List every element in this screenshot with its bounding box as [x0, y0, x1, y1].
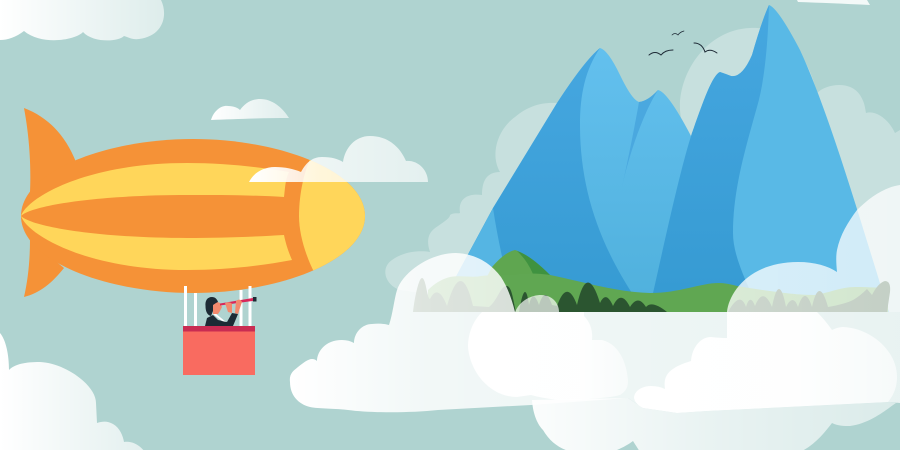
cloud: in front of airship — [249, 136, 428, 182]
cloud: bottom centre — [532, 398, 897, 450]
mountain crease — [622, 90, 658, 187]
gondola basket — [183, 326, 255, 375]
back hill — [488, 250, 550, 276]
right mountain — [645, 5, 889, 312]
jacket — [205, 313, 238, 326]
left mountain shadow — [437, 48, 645, 312]
face — [213, 300, 222, 314]
cloud: white front right — [634, 312, 897, 413]
yellow nose — [299, 160, 365, 270]
hair — [205, 297, 218, 316]
cloud: bottom left — [0, 333, 145, 450]
right tree line — [728, 281, 890, 312]
collar — [213, 313, 226, 322]
left tree line — [413, 278, 667, 312]
airship fins — [24, 108, 76, 297]
man with telescope — [205, 297, 256, 326]
gondola ropes — [184, 286, 252, 327]
cloud: top right sliver — [797, 0, 870, 5]
green hills — [428, 250, 888, 312]
basket rim — [183, 326, 255, 332]
left mountain — [437, 48, 700, 312]
right mountain shadow — [645, 5, 769, 312]
airship — [21, 108, 365, 297]
cloud: mist layer in front of island — [290, 185, 900, 413]
yellow stripe lower — [21, 216, 292, 270]
hands and arms — [225, 300, 242, 314]
cloud: small dome over trees — [515, 295, 559, 312]
mountains — [437, 5, 889, 312]
telescope — [220, 298, 256, 306]
cloud: small upper — [211, 99, 289, 120]
cloud: top left — [0, 0, 164, 40]
telescope end — [253, 297, 256, 302]
cloud: pale behind mountains — [385, 28, 900, 312]
airship envelope — [21, 139, 365, 293]
yellow stripe upper — [21, 163, 289, 216]
dark trees — [413, 278, 890, 312]
front hill — [428, 274, 888, 312]
cloud: white blob centre — [468, 312, 628, 400]
birds — [649, 31, 717, 55]
back hill shadow — [517, 251, 550, 275]
basket body — [183, 331, 255, 375]
left mountain sliver — [437, 208, 505, 312]
